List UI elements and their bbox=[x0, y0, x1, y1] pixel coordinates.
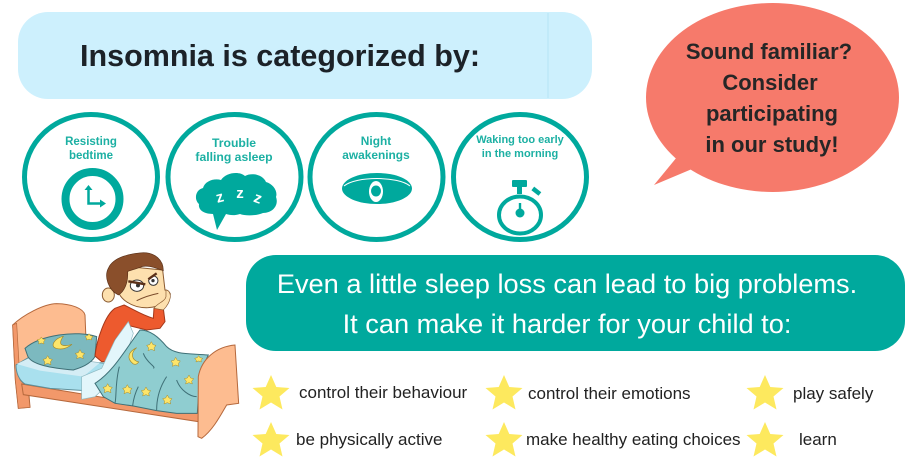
message text bbox=[277, 268, 857, 339]
callout text: Consider bbox=[722, 70, 818, 95]
label: trouble falling asleep: falling asleep bbox=[195, 150, 273, 164]
icon: sleep cloud: z bbox=[214, 188, 226, 207]
illustration: boy sitting up in bed bbox=[13, 253, 239, 438]
title: Insomnia is categorized by: bbox=[80, 39, 480, 73]
item: make healthy eating choices: make healthy eating choices bbox=[526, 430, 741, 449]
ear bbox=[102, 288, 114, 302]
label: resisting bedtime: Resisting bbox=[65, 136, 117, 148]
icon: sleep cloud: z bbox=[236, 185, 244, 202]
label: trouble falling asleep bbox=[195, 136, 273, 164]
speech bubble callout bbox=[646, 3, 899, 192]
header banner bbox=[18, 12, 592, 99]
label: waking too early bbox=[476, 134, 565, 160]
label: night awakenings: Night bbox=[361, 134, 391, 148]
label: waking too early: in the morning bbox=[482, 148, 558, 160]
stars on bedding bbox=[37, 334, 203, 404]
item: control their behaviour: control their behaviour bbox=[299, 383, 468, 402]
shirt bbox=[95, 305, 165, 362]
message panel bbox=[246, 255, 905, 351]
face bbox=[117, 267, 170, 308]
blanket bbox=[95, 330, 208, 413]
panel: night awakenings bbox=[310, 114, 443, 240]
label: trouble falling asleep: Trouble bbox=[212, 136, 256, 150]
item: learn: learn bbox=[799, 430, 837, 449]
item: control their emotions bbox=[486, 375, 691, 410]
eyes and mouth bbox=[128, 273, 158, 301]
label: night awakenings: awakenings bbox=[342, 148, 410, 162]
item: be physically active: be physically active bbox=[296, 430, 442, 449]
message text: It can make it harder for your child to: bbox=[343, 308, 791, 339]
sheet bbox=[82, 322, 133, 399]
pillow bbox=[25, 334, 97, 370]
callout text: participating bbox=[706, 101, 838, 126]
callout text: Sound familiar? bbox=[686, 39, 852, 64]
bed frame rail bbox=[22, 384, 200, 422]
icon: eye bbox=[342, 173, 412, 204]
item: learn bbox=[746, 422, 837, 456]
panel: waking too early bbox=[454, 114, 586, 240]
footboard bbox=[198, 345, 239, 438]
panel: trouble falling asleep bbox=[168, 114, 301, 240]
list: consequences bbox=[252, 375, 874, 456]
panel: resisting bedtime bbox=[24, 114, 158, 240]
item: control their emotions: control their emotions bbox=[528, 384, 691, 403]
pillow moon bbox=[53, 336, 72, 349]
hair bbox=[107, 253, 163, 295]
icon: clock bbox=[66, 172, 120, 226]
callout text: in our study! bbox=[705, 132, 839, 157]
hand bbox=[154, 290, 170, 310]
label: resisting bedtime: bedtime bbox=[69, 150, 113, 162]
item: play safely bbox=[746, 375, 874, 410]
headboard and legs bbox=[13, 304, 86, 408]
icon: sleep cloud: z bbox=[251, 189, 264, 208]
item: be physically active bbox=[252, 422, 442, 456]
label: waking too early: Waking too early bbox=[476, 134, 565, 146]
label: night awakenings bbox=[342, 134, 410, 162]
callout text bbox=[686, 39, 852, 157]
item: play safely: play safely bbox=[793, 384, 874, 403]
item: control their behaviour bbox=[252, 375, 468, 410]
item: make healthy eating choices bbox=[486, 422, 741, 456]
label: resisting bedtime bbox=[65, 136, 117, 162]
message text: Even a little sleep loss can lead to big problems. bbox=[277, 268, 857, 299]
blanket moon bbox=[129, 348, 139, 364]
icon: stopwatch bbox=[499, 180, 541, 234]
mattress bbox=[16, 357, 107, 392]
icon: sleep cloud bbox=[196, 173, 277, 230]
